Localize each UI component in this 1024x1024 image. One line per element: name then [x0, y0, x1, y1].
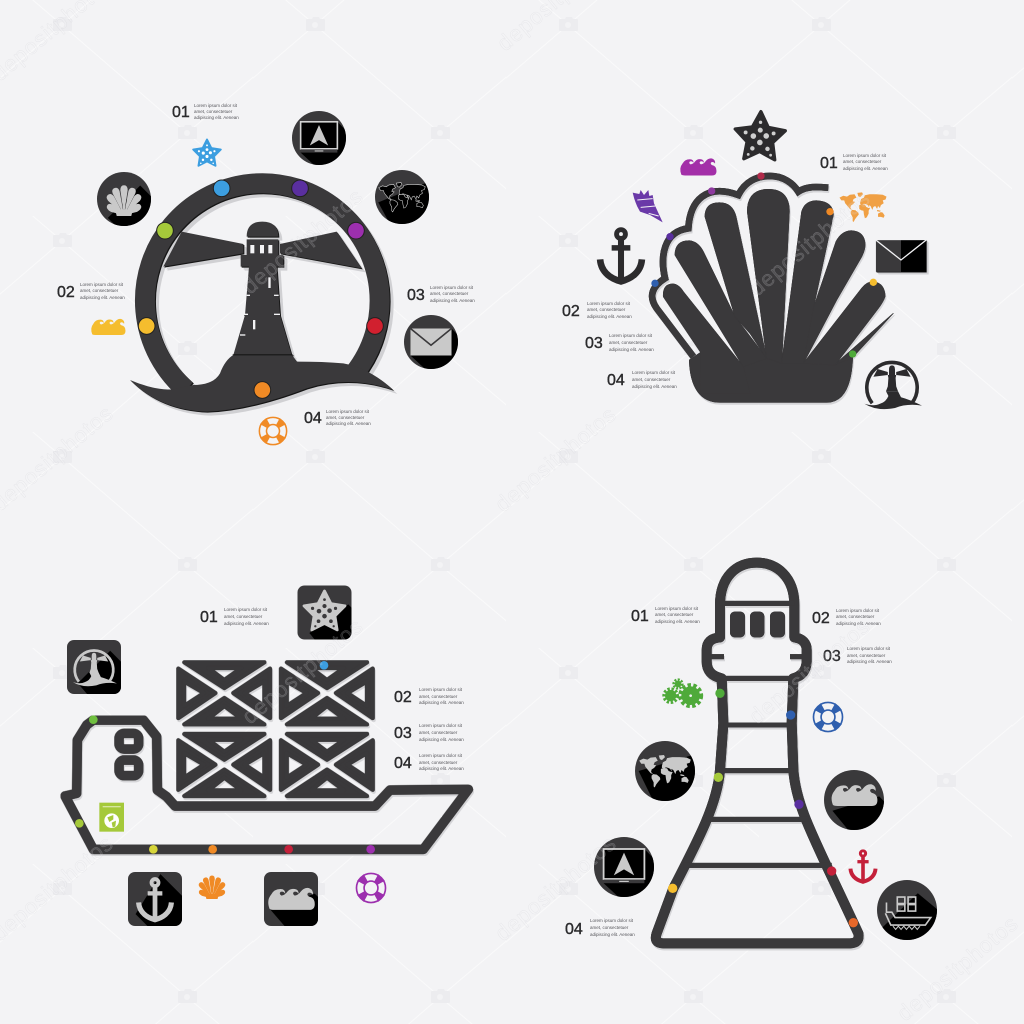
label 03	[823, 646, 892, 665]
watermark text: depositphotos	[490, 830, 621, 946]
icon: orange lifebuoy	[259, 417, 287, 445]
label 04: Lorem ipsum dolor sit	[632, 370, 676, 375]
label 03: 03	[585, 335, 603, 352]
icon: purple wave	[680, 158, 716, 176]
icon: blue lifebuoy	[813, 702, 843, 732]
label 02: adipiscing elit. Aenean	[587, 314, 632, 319]
label 01: 01	[172, 104, 190, 121]
icon: purple conch	[633, 190, 663, 222]
badge: monitor	[292, 111, 346, 165]
badge: wave	[264, 872, 318, 926]
icon: orange world map	[840, 192, 886, 222]
label 02	[812, 608, 881, 627]
label 02: adipiscing elit. Aenean	[419, 700, 464, 705]
label 01	[200, 607, 269, 626]
label 04: amet, consectetuer	[590, 925, 629, 930]
watermark text: depositphotos	[237, 183, 368, 299]
badge: world map	[375, 170, 429, 224]
label 01: amet, consectetuer	[224, 614, 263, 619]
label 02: amet, consectetuer	[836, 614, 875, 619]
ring colour dots	[138, 180, 383, 398]
scallop colour dots	[651, 172, 877, 358]
label 01: 01	[631, 608, 649, 625]
label 04	[394, 753, 464, 772]
label 03: Lorem ipsum dolor sit	[609, 333, 653, 338]
label 01: Lorem ipsum dolor sit	[655, 606, 699, 611]
watermark text: depositphotos	[237, 613, 368, 729]
icon: black starfish	[734, 111, 786, 160]
label 04: adipiscing elit. Aenean	[632, 384, 677, 389]
label 03	[407, 285, 475, 304]
label 04: amet, consectetuer	[419, 760, 458, 765]
label 02: amet, consectetuer	[587, 307, 626, 312]
label 03: amet, consectetuer	[419, 730, 458, 735]
label 03: adipiscing elit. Aenean	[847, 659, 892, 664]
label 01: Lorem ipsum dolor sit	[224, 607, 268, 612]
label 02: amet, consectetuer	[419, 694, 458, 699]
label 03: 03	[823, 648, 841, 665]
badge: starfish	[298, 586, 352, 640]
label 02: Lorem ipsum dolor sit	[419, 687, 463, 692]
panel: scallop shell	[562, 111, 926, 409]
lighthouse ring figure	[130, 183, 393, 412]
badge: world map	[635, 741, 695, 801]
scallop figure	[652, 176, 893, 402]
watermark text: depositphotos	[744, 613, 875, 729]
label 03: amet, consectetuer	[609, 340, 648, 345]
label 04	[565, 918, 635, 938]
icon: green globe tag	[99, 803, 124, 832]
panel: lighthouse in ring	[57, 103, 484, 445]
tower figure	[656, 563, 859, 943]
label 03: amet, consectetuer	[430, 291, 469, 296]
label 02: Lorem ipsum dolor sit	[80, 282, 124, 287]
label 04: Lorem ipsum dolor sit	[419, 753, 463, 758]
label 03: amet, consectetuer	[847, 653, 886, 658]
label 01: amet, consectetuer	[843, 159, 882, 164]
label 04	[304, 409, 371, 427]
panel: cargo ship	[65, 586, 468, 958]
label 01: amet, consectetuer	[194, 109, 233, 114]
label 03: 03	[407, 287, 425, 304]
label 01	[172, 103, 239, 121]
label 04: 04	[304, 410, 322, 427]
label 02: 02	[394, 689, 412, 706]
tower colour dots	[668, 689, 858, 927]
label 03: 03	[394, 725, 412, 742]
label 04: amet, consectetuer	[632, 377, 671, 382]
label 03: Lorem ipsum dolor sit	[847, 646, 891, 651]
icon: dark anchor	[600, 230, 642, 281]
label 01: 01	[820, 155, 838, 172]
watermark text: depositphotos	[490, 401, 621, 517]
icon: split envelope	[876, 240, 926, 272]
label 02	[394, 687, 464, 706]
label 01: 01	[200, 609, 218, 626]
label 02: Lorem ipsum dolor sit	[836, 608, 880, 613]
label 04: Lorem ipsum dolor sit	[590, 918, 634, 923]
icon: red anchor	[850, 851, 876, 882]
label 01	[820, 153, 888, 172]
label 01: adipiscing elit. Aenean	[843, 166, 888, 171]
label 03	[585, 333, 654, 352]
label 01: adipiscing elit. Aenean	[655, 619, 700, 624]
label 01: adipiscing elit. Aenean	[194, 115, 239, 120]
label 02: 02	[57, 284, 75, 301]
badge: monitor	[594, 837, 654, 897]
label 01	[631, 606, 700, 625]
icon: blue starfish	[193, 139, 221, 166]
label 04: adipiscing elit. Aenean	[590, 932, 635, 937]
label 04: Lorem ipsum dolor sit	[326, 409, 370, 414]
badge: envelope	[404, 315, 458, 369]
label 02: Lorem ipsum dolor sit	[587, 301, 631, 306]
badge: wave	[824, 770, 884, 830]
panel: lighthouse tower	[565, 558, 937, 950]
label 02	[57, 282, 125, 301]
label 02	[562, 301, 632, 320]
badge: ship	[877, 880, 937, 940]
label 04: 04	[565, 921, 583, 938]
label 04: amet, consectetuer	[326, 415, 365, 420]
watermark text: depositphotos	[892, 910, 1023, 1024]
label 01: amet, consectetuer	[655, 612, 694, 617]
label 03: adipiscing elit. Aenean	[419, 737, 464, 742]
icon: orange shell	[198, 875, 226, 901]
label 02: 02	[812, 610, 830, 627]
label 02: adipiscing elit. Aenean	[80, 295, 125, 300]
watermark text: depositphotos	[744, 185, 875, 301]
icon: purple lifebuoy	[356, 873, 386, 903]
ship colour dots	[75, 661, 375, 854]
label 01: Lorem ipsum dolor sit	[843, 153, 887, 158]
badge: lighthouse	[67, 640, 121, 694]
badge: anchor	[128, 872, 182, 926]
label 03: adipiscing elit. Aenean	[430, 298, 475, 303]
label 02: adipiscing elit. Aenean	[836, 621, 881, 626]
icon: yellow wave	[91, 319, 126, 335]
label 02: amet, consectetuer	[80, 288, 119, 293]
label 04: adipiscing elit. Aenean	[419, 766, 464, 771]
label 03	[394, 723, 464, 742]
label 03: adipiscing elit. Aenean	[609, 347, 654, 352]
label 03: Lorem ipsum dolor sit	[419, 723, 463, 728]
badge: shell	[97, 172, 151, 226]
label 02: 02	[562, 303, 580, 320]
icon: green gears	[664, 680, 701, 706]
label 04: adipiscing elit. Aenean	[326, 421, 371, 426]
label 04	[607, 370, 677, 389]
label 01: Lorem ipsum dolor sit	[194, 103, 238, 108]
label 04: 04	[607, 372, 625, 389]
label 01: adipiscing elit. Aenean	[224, 621, 269, 626]
ship hull figure	[65, 662, 468, 849]
label 04: 04	[394, 755, 412, 772]
label 03: Lorem ipsum dolor sit	[430, 285, 474, 290]
icon: mini lighthouse	[864, 362, 922, 409]
